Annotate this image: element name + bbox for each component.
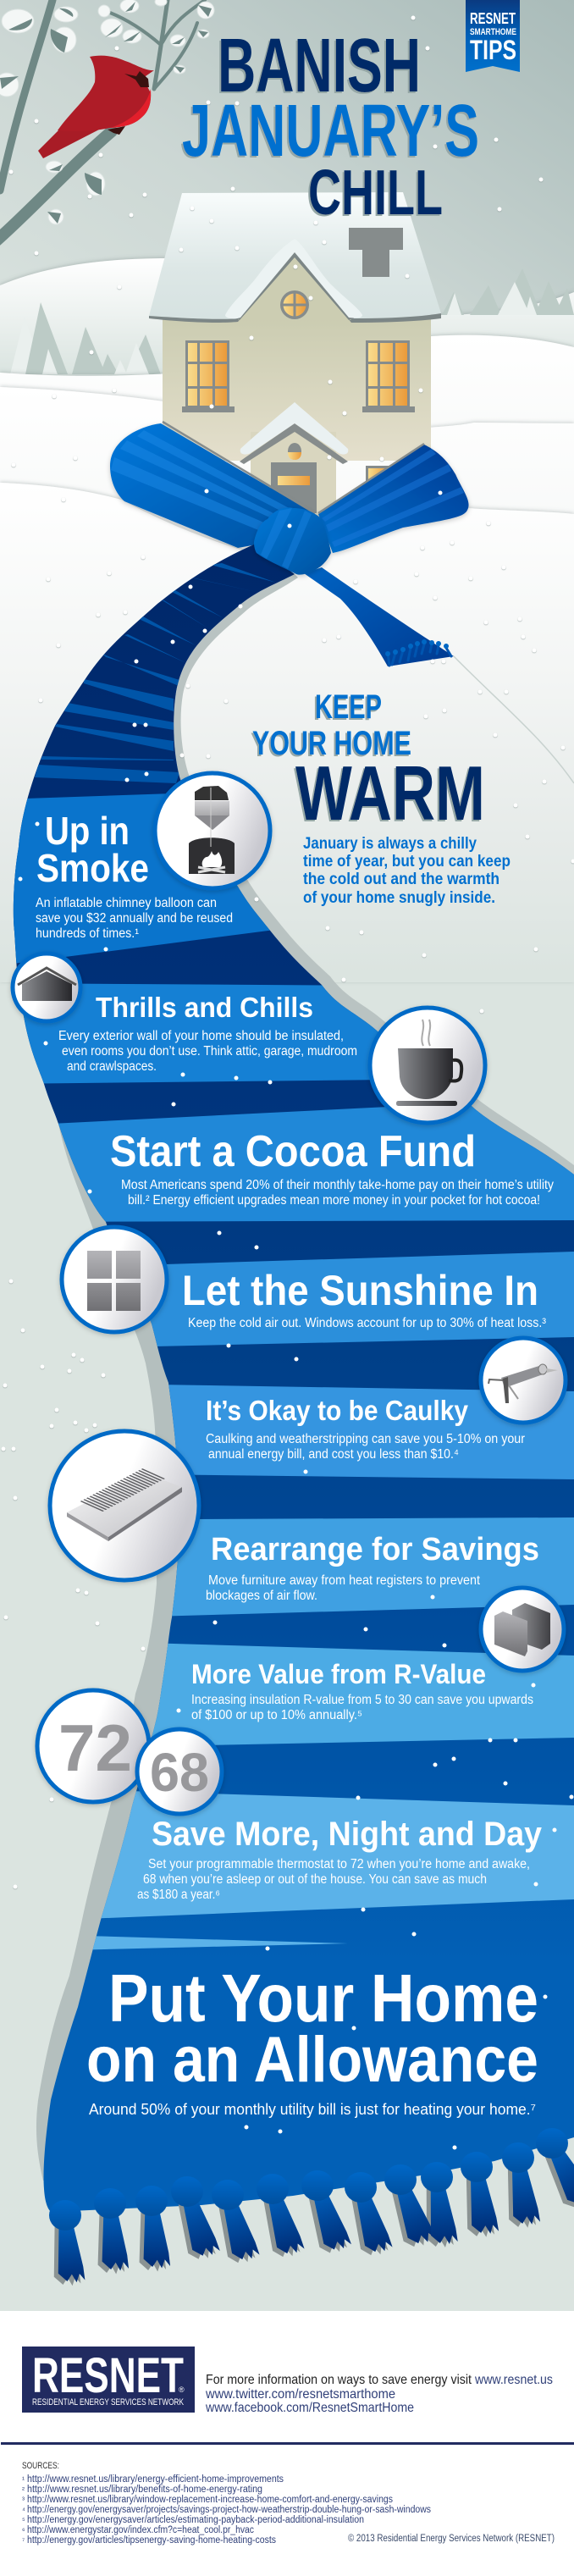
footer rule: [1, 2442, 574, 2445]
tip 3 text: [121, 1178, 554, 1208]
trees: left pine cluster: [10, 302, 161, 374]
tip 7 text: Increasing insulation R-value from 5 to 30 can save you upwards: [191, 1693, 533, 1707]
sources list: ³: [22, 2496, 25, 2504]
wedge stripe above allowance: [93, 1936, 346, 1949]
tip 4 text: Keep the cold air out. Windows account for up to 30% of heat loss.³: [188, 1316, 546, 1330]
band: It's Okay to be Caulky: [168, 1385, 574, 1479]
tip 8 text: Set your programmable thermostat to 72 when you’re home and awake,: [148, 1857, 530, 1871]
tip 2 text: even rooms you don’t use. Think attic, garage, mudroom: [62, 1044, 357, 1059]
tip 1 text: An inflatable chimney balloon can: [36, 896, 217, 910]
ribbon badge: RESNET SmartHome Tips: RESNET: [470, 10, 516, 27]
contact links: [205, 2373, 553, 2415]
scarf: inner shadow strip: [174, 574, 574, 1175]
logo: RESNET: RESNET: [32, 2348, 184, 2403]
house walls: [163, 317, 431, 461]
tip 3 text: bill.² Energy efficient upgrades mean more money in your pocket for hot cocoa!: [128, 1193, 540, 1208]
snow droplets on background: [3, 18, 573, 1887]
sources list: http://energy.gov/energysaver/articles/estimating-payback-period-additional-insulation: [27, 2515, 364, 2525]
band: Up in Smoke: [14, 793, 270, 964]
background: snowfield: [0, 373, 574, 2311]
intro text: of your home snugly inside.: [303, 889, 495, 907]
icon disc: coffee cup: [370, 1008, 485, 1123]
tip 1 heading: Up in Smoke: [36, 809, 149, 890]
tip 7 heading: More Value from R-Value: [191, 1659, 486, 1689]
contact links: For more information on ways to save energy visit: [206, 2373, 472, 2387]
tip 8 text: [137, 1857, 530, 1902]
scarf: main striped band: [0, 533, 574, 2227]
tip 2 text: and crawlspaces.: [67, 1059, 157, 1074]
hill line: right slope: [454, 656, 574, 783]
icon disc: thermostat 68: 68: [150, 1742, 209, 1803]
sources list: http://energy.gov/articles/tipsenergy-saving-home-heating-costs: [27, 2535, 276, 2546]
icon disc: thermostat 72: 72: [58, 1711, 132, 1785]
tip 5 text: Caulking and weatherstripping can save you 5-10% on your: [206, 1432, 525, 1446]
trees: right pine cluster: [442, 268, 574, 315]
scarf: left wrap around house: [110, 422, 315, 548]
contact links: www.resnet.us: [474, 2373, 553, 2387]
porch wall: [251, 432, 336, 517]
ribbon badge: RESNET SmartHome Tips: [466, 0, 520, 72]
tip 6 text: Move furniture away from heat registers to prevent: [208, 1573, 481, 1588]
tip 1 heading: Up in Smoke: Up in: [45, 809, 130, 853]
final text: Around 50% of your monthly utility bill is just for heating your home.⁷: [89, 2101, 536, 2118]
background: winter sky: [0, 0, 574, 390]
sources list: ⁷: [22, 2536, 25, 2545]
heading: Keep your home warm: KEEP: [315, 688, 382, 726]
icon: red cardinal: [38, 56, 154, 158]
contact links: www.facebook.com/ResnetSmartHome: [205, 2401, 414, 2415]
porch snow cap: [240, 402, 348, 455]
thin stripes near the neck: [35, 563, 276, 783]
icon disc: chimney balloon: [155, 773, 270, 888]
gable shadow: [235, 249, 354, 320]
sources list: ²: [22, 2485, 25, 2494]
gable wall: [238, 254, 351, 320]
title: BANISH: [218, 24, 421, 108]
gable snow cap: [225, 239, 362, 318]
tip 5 text: [206, 1432, 525, 1462]
icon disc: thermostat 72: [37, 1690, 149, 1802]
tip 8 text: as $180 a year.⁶: [137, 1888, 220, 1902]
heading: Keep your home warm: [252, 688, 485, 837]
tip 6 heading: Rearrange for Savings: [211, 1532, 539, 1567]
hill: lower snow ridge: [0, 483, 574, 982]
intro text: [303, 835, 511, 907]
band: Rearrange for Savings: [172, 1517, 574, 1616]
icon disc: thermostat 68: [137, 1729, 222, 1814]
tip 1 text: save you $32 annually and be reused: [36, 911, 233, 926]
ribbon badge: RESNET SmartHome Tips: TIPS: [470, 35, 516, 65]
scarf: left shadow strip: [36, 1124, 254, 2181]
band: Save More, Night and Day: [102, 1791, 574, 1919]
sources list: http://www.resnet.us/library/window-replacement-increase-home-comfort-and-energy-savings: [27, 2495, 393, 2505]
tip 8 text: 68 when you’re asleep or out of the house. You can save as much: [143, 1872, 487, 1887]
sources list: http://www.resnet.us/library/energy-efficient-home-improvements: [27, 2474, 284, 2485]
scarf: tail with fringe: [304, 567, 454, 666]
title: [182, 24, 479, 228]
scarf: right wrap around house: [318, 444, 469, 553]
tip 7 text: of $100 or up to 10% annually.⁵: [191, 1708, 362, 1722]
scarf: knot: [254, 507, 331, 575]
house: [149, 192, 441, 517]
icon disc: floor vent: [50, 1431, 199, 1580]
sources list: ⁴: [22, 2506, 25, 2514]
leaves: snow-capped leaves: [0, 0, 214, 224]
heading: Keep your home warm: WARM: [295, 751, 485, 837]
porch roof shadow: [240, 423, 348, 464]
hill: front snow ridge: [0, 387, 574, 593]
tip 5 heading: It’s Okay to be Caulky: [206, 1395, 469, 1426]
icon disc: house outline: [13, 954, 80, 1021]
title: CHILL: [308, 157, 443, 228]
left window: [182, 340, 235, 412]
intro text: January is always a chilly: [303, 835, 477, 853]
front door: [271, 462, 317, 513]
sources list: http://energy.gov/energysaver/projects/savings-project-how-weatherstrip-double-hung-or-sash-windows: [27, 2505, 431, 2515]
final heading: [86, 1960, 538, 2096]
right window: [362, 340, 415, 412]
tip 2 heading: Thrills and Chills: [96, 992, 313, 1023]
snowflakes on scarf: [20, 491, 571, 2148]
house roof eave: [149, 254, 441, 323]
tip 5 text: annual energy bill, and cost you less than $10.⁴: [208, 1447, 459, 1462]
icon disc: insulation blocks: [481, 1588, 564, 1671]
sources list: ⁵: [22, 2516, 25, 2524]
sources list: ¹: [22, 2475, 25, 2484]
contact links: www.twitter.com/resnetsmarthome: [205, 2387, 395, 2402]
tip 1 text: [36, 896, 233, 941]
scarf: bottom fringe: [49, 2128, 574, 2287]
tip 4 heading: Let the Sunshine In: [182, 1267, 538, 1314]
branches: tree behind cardinal: [0, 0, 205, 240]
hill: middle snow ridge: [0, 335, 574, 525]
tip 2 text: Every exterior wall of your home should be insulated,: [58, 1029, 344, 1043]
band: More Value from R-Value: [152, 1643, 574, 1745]
chimney: [349, 228, 403, 277]
icon disc: window: [62, 1227, 167, 1332]
round attic window: [280, 290, 309, 319]
logo: RESNET: ®: [179, 2385, 185, 2394]
porch small window: [288, 443, 301, 460]
tip 6 text: [206, 1573, 481, 1603]
band: Start a Cocoa Fund: [58, 1106, 574, 1222]
house roof: [149, 192, 441, 319]
band: Let the Sunshine In: [151, 1252, 574, 1346]
sources list: http://www.resnet.us/library/benefits-of-home-energy-rating: [27, 2485, 262, 2495]
logo: RESNET: RESIDENTIAL ENERGY SERVICES NETWORK: [32, 2397, 184, 2407]
intro text: time of year, but you can keep: [303, 853, 511, 871]
sources list: http://www.energystar.gov/index.cfm?c=heat_cool.pr_hvac: [27, 2525, 254, 2535]
tip 2 text: [58, 1029, 357, 1074]
sources list: SOURCES:: [22, 2461, 59, 2471]
band: Thrills and Chills: [0, 983, 389, 1084]
tip 1 heading: Up in Smoke: Smoke: [36, 846, 149, 890]
ribbon badge: RESNET SmartHome Tips: SMARTHOME: [470, 27, 516, 37]
tip 1 text: hundreds of times.¹: [36, 926, 139, 941]
sources list: ⁶: [22, 2526, 25, 2535]
icon disc: caulk gun: [481, 1338, 566, 1423]
tip 7 text: [191, 1693, 533, 1722]
heading: Keep your home warm: YOUR HOME: [252, 725, 411, 762]
right lower window: [366, 466, 391, 491]
tip 3 heading: Start a Cocoa Fund: [110, 1127, 476, 1176]
hill: back snow ridge: [0, 258, 574, 377]
intro text: the cold out and the warmth: [303, 871, 499, 888]
tip 8 heading: Save More, Night and Day: [152, 1816, 543, 1853]
logo: RESNET: [22, 2347, 195, 2413]
sources list: [22, 2461, 431, 2546]
tip 6 text: blockages of air flow.: [206, 1589, 317, 1603]
